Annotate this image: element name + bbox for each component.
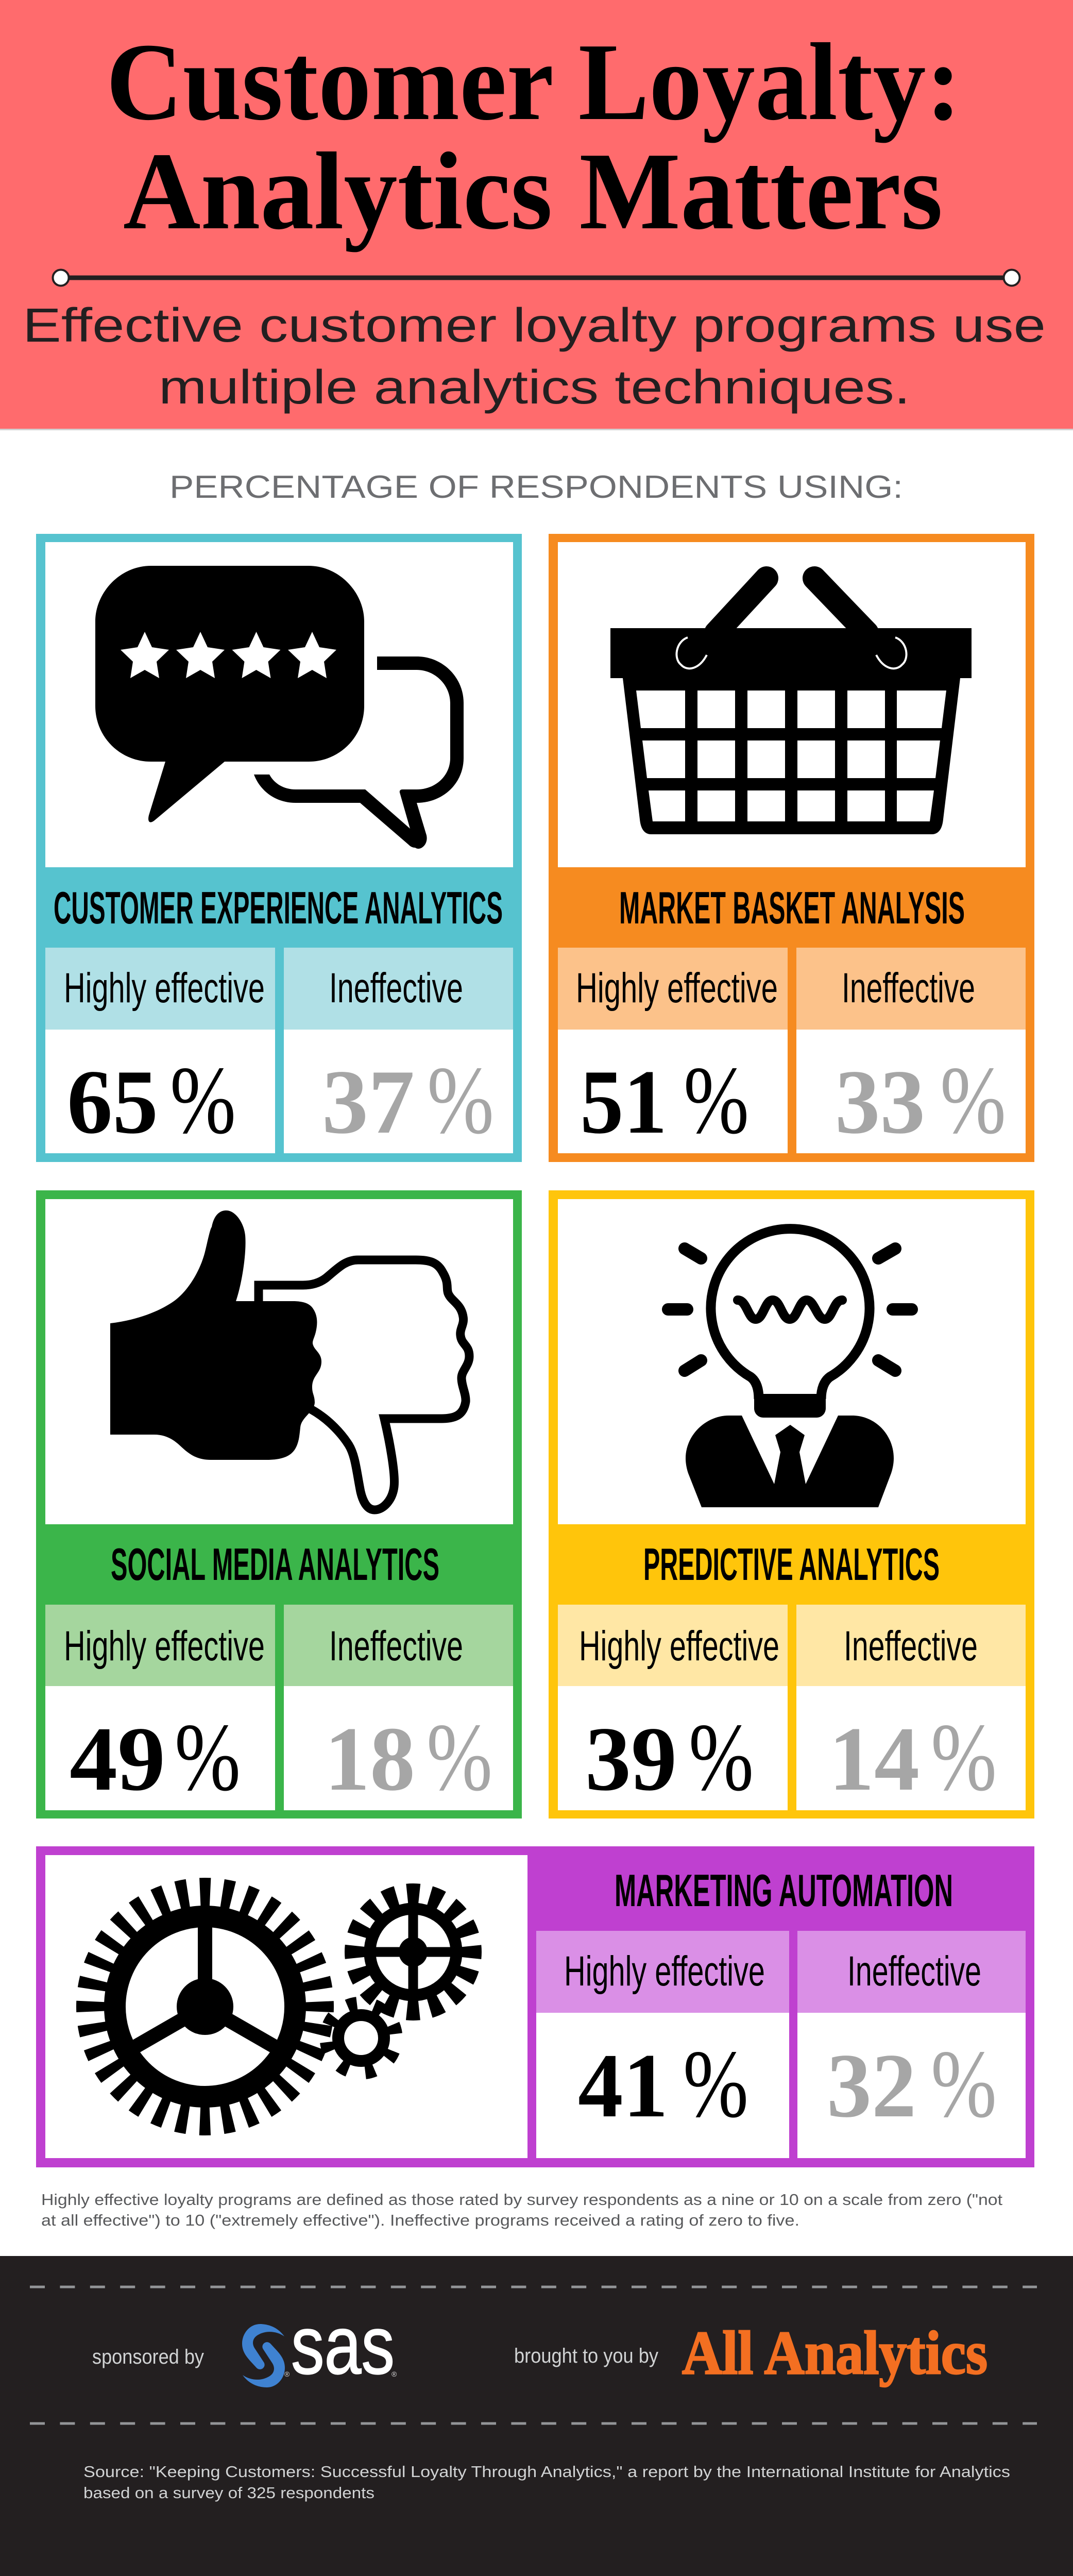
highly effective cell: Highly effective [576,965,778,1012]
highly effective cell: 39 [585,1708,677,1810]
logo: All Analytics: All Analytics [682,2318,987,2387]
highly effective cell: % [683,2030,748,2137]
highly effective cell [558,1605,788,1811]
icon: gears [91,1892,472,2121]
ineffective cell [796,948,1026,1154]
icon: shopping basket [610,578,972,834]
logo: SAS: sas [291,2299,395,2391]
highly effective cell: 41 [578,2034,668,2136]
highly effective cell: 51 [580,1051,667,1153]
footnote [41,2191,1002,2229]
source note: based on a survey of 325 respondents [83,2484,374,2502]
subtitle [23,298,1046,414]
highly effective cell [536,1931,789,2158]
footer [0,2256,1073,2576]
highly effective cell: % [684,1046,749,1154]
highly effective cell: Highly effective [64,1623,265,1670]
logo: SAS: ® [284,2370,290,2378]
highly effective cell [45,948,275,1154]
panel: customer experience analytics [36,534,522,1162]
ineffective cell: 32 [827,2034,916,2136]
title [106,20,961,252]
ineffective cell: Ineffective [329,965,463,1012]
panel: social media analytics [36,1190,522,1819]
ineffective cell [796,1605,1026,1811]
heading: SOCIAL MEDIA ANALYTICS [111,1539,439,1590]
divider with end dots [53,270,1020,285]
highly effective cell: Highly effective [64,965,265,1012]
ineffective cell: % [931,2030,997,2137]
logo: SAS: ® [391,2370,397,2378]
icon: thumbs up and thumbs down [110,1210,469,1510]
ineffective cell: % [427,1046,494,1154]
panel: market basket analysis [549,534,1034,1162]
title: Analytics Matters [123,129,943,252]
highly effective cell: 65 [67,1051,158,1153]
ineffective cell: Ineffective [847,1948,981,1995]
source note: Source: "Keeping Customers: Successful Loyalty Through Analytics," a report by the International Institute for Analytics [83,2463,1010,2481]
sponsored by label: sponsored by [92,2346,204,2368]
panel: marketing automation [36,1846,1034,2167]
footnote: Highly effective loyalty programs are defined as those rated by survey respondents as a nine or 10 on a scale from zero ("not [41,2191,1002,2209]
ineffective cell: 14 [829,1708,919,1810]
footnote: at all effective") to 10 ("extremely effective"). Ineffective programs received a rating of zero to five. [41,2211,799,2229]
ineffective cell: % [940,1046,1006,1154]
highly effective cell: % [689,1703,754,1811]
ineffective cell [284,948,513,1154]
ineffective cell [284,1605,513,1811]
title: Customer Loyalty: [106,20,961,143]
highly effective cell [45,1605,275,1811]
subtitle: multiple analytics techniques. [159,360,910,414]
ineffective cell: Ineffective [329,1623,463,1670]
section heading: PERCENTAGE OF RESPONDENTS USING: [169,469,903,505]
panel: predictive analytics [549,1190,1034,1819]
ineffective cell: 33 [835,1051,925,1153]
icon: speech bubbles with stars [95,566,464,849]
icon: lightbulb head in a suit [668,1229,912,1507]
ineffective cell: % [931,1703,997,1811]
highly effective cell: Highly effective [579,1623,779,1670]
highly effective cell [558,948,788,1154]
ineffective cell: 18 [325,1708,415,1810]
header banner [0,0,1073,430]
ineffective cell [797,1931,1026,2158]
subtitle: Effective customer loyalty programs use [23,298,1046,352]
highly effective cell: % [170,1046,236,1154]
brought to you by label: brought to you by [514,2345,658,2367]
logo: SAS [242,2299,397,2391]
highly effective cell: % [175,1703,241,1811]
highly effective cell: Highly effective [564,1948,765,1995]
ineffective cell: % [427,1703,492,1811]
ineffective cell: Ineffective [844,1623,978,1670]
ineffective cell: 37 [322,1051,415,1153]
highly effective cell: 49 [70,1708,165,1810]
ineffective cell: Ineffective [842,965,975,1012]
heading: CUSTOMER EXPERIENCE ANALYTICS [54,882,503,933]
source note [83,2463,1010,2502]
